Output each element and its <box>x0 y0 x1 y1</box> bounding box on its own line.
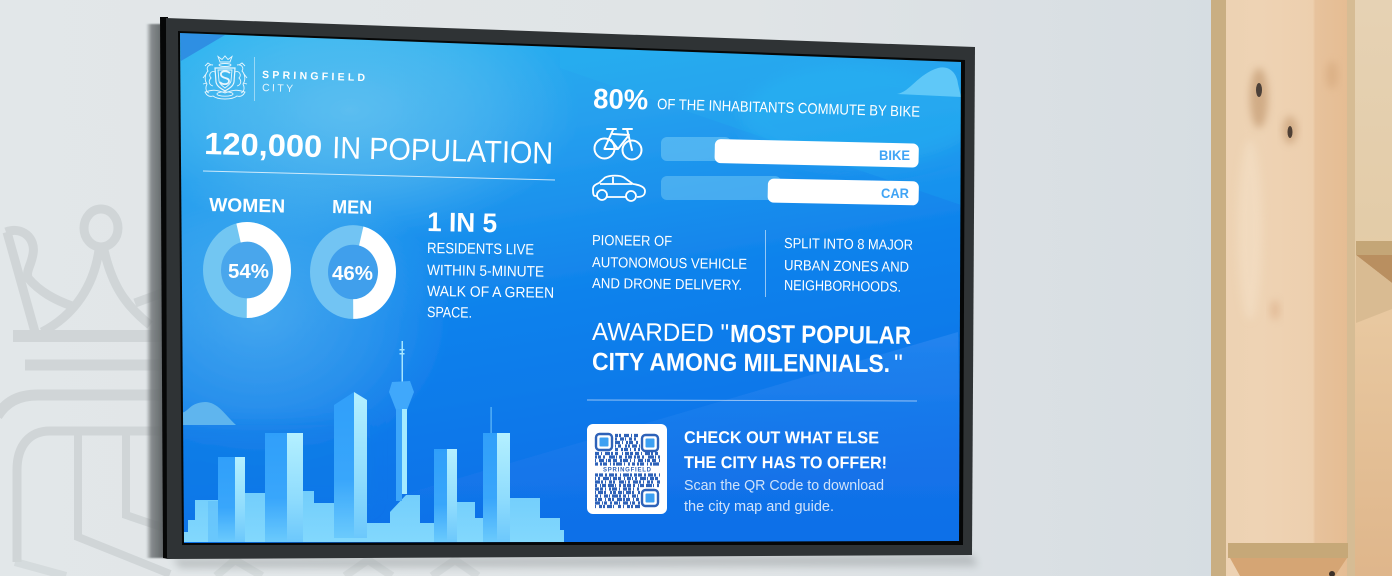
wall crest line art <box>0 209 478 576</box>
screen <box>180 33 961 543</box>
pioneer text: PIONEER OF <box>592 233 672 250</box>
building 4 <box>434 449 457 542</box>
donut men 46%: 46% <box>332 263 373 285</box>
donut women 54% <box>205 224 289 316</box>
wooden shelving <box>1211 0 1392 576</box>
zones text: NEIGHBORHOODS. <box>784 278 901 296</box>
skyline <box>184 341 564 542</box>
bike commute heading: 80% <box>593 83 649 115</box>
QR code: SPRINGFIELD <box>603 468 652 474</box>
cloud right <box>897 67 961 97</box>
icon: bicycle <box>594 129 642 160</box>
donut men 46% <box>312 227 394 317</box>
building 1 <box>218 457 245 542</box>
zones text: SPLIT INTO 8 MAJOR <box>784 236 913 254</box>
bar: car: CAR <box>881 185 909 201</box>
green space stat <box>427 207 554 322</box>
display frame <box>160 17 975 559</box>
display shadow <box>146 24 978 568</box>
donut women 54%: 54% <box>228 261 269 283</box>
bike commute heading: OF THE INHABITANTS COMMUTE BY BIKE <box>657 96 920 121</box>
award text: AWARDED " <box>592 318 729 347</box>
logo wordmark: CITY <box>262 82 293 95</box>
award text: MOST POPULAR <box>730 320 911 350</box>
logo <box>203 56 366 101</box>
green space stat: RESIDENTS LIVE <box>427 240 534 258</box>
QR code <box>587 424 667 514</box>
logo wordmark: SPRINGFIELD <box>262 69 366 84</box>
building 5 <box>483 407 510 542</box>
heading rule <box>203 171 555 180</box>
men label: MEN <box>332 197 372 219</box>
low buildings <box>184 491 564 542</box>
bar: car <box>661 176 919 205</box>
green space stat: SPACE. <box>427 304 472 322</box>
population heading <box>206 132 552 164</box>
logo wordmark <box>262 70 365 92</box>
pioneer text <box>592 235 746 290</box>
zones text: URBAN ZONES AND <box>784 258 909 276</box>
green space stat: WALK OF A GREEN <box>427 283 554 302</box>
screen background <box>180 33 961 543</box>
award text: CITY AMONG MILENNIALS. <box>592 348 890 378</box>
population heading: IN POPULATION <box>332 130 554 171</box>
pioneer text: AUTONOMOUS VEHICLE <box>592 255 747 273</box>
crest <box>203 56 247 99</box>
call to action text <box>684 428 887 515</box>
women label: WOMEN <box>209 195 285 218</box>
award text <box>592 322 910 372</box>
green space stat: 1 IN 5 <box>427 207 497 238</box>
icon: car <box>593 176 645 201</box>
bike commute heading <box>594 88 920 117</box>
green space stat: WITHIN 5-MINUTE <box>427 262 544 281</box>
population heading: 120,000 <box>204 126 323 164</box>
building 3 <box>334 392 367 538</box>
bar: bike: BIKE <box>879 147 910 163</box>
call to action text: THE CITY HAS TO OFFER! <box>684 453 887 472</box>
call to action text: Scan the QR Code to download <box>684 478 884 494</box>
call to action text: CHECK OUT WHAT ELSE <box>684 428 879 447</box>
zones text <box>784 236 913 296</box>
call to action text: the city map and guide. <box>684 499 834 515</box>
award text: " <box>894 350 903 378</box>
pioneer text: AND DRONE DELIVERY. <box>592 276 742 294</box>
column divider <box>765 230 766 297</box>
bar: bike <box>661 137 919 168</box>
logo divider <box>254 57 255 101</box>
award rule <box>587 400 917 401</box>
tower <box>389 341 414 501</box>
cloud left <box>182 402 236 425</box>
building 2 <box>265 433 303 542</box>
